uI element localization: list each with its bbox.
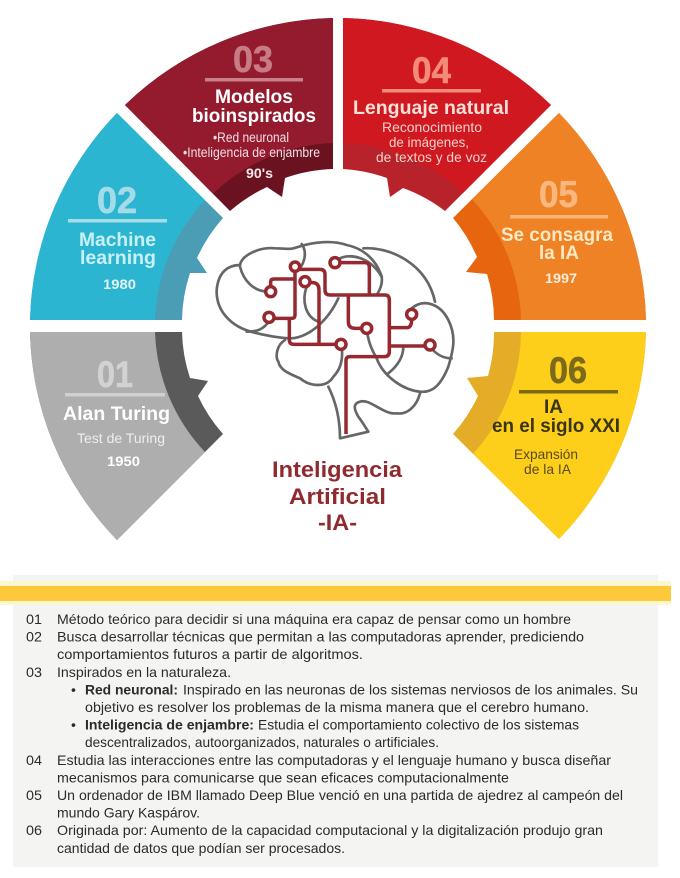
panel: 04 Lenguaje natural sector: 04 (412, 50, 451, 91)
text block: descriptions: 05 (26, 787, 42, 803)
panel: 02 Machine learning sector (30, 113, 223, 320)
text block: descriptions: Busca desarrollar técnicas que permitan a las computadoras aprender, prediciendo (57, 629, 584, 645)
text block: descriptions: Inteligencia de enjambre: (85, 717, 254, 733)
panel: 04 Lenguaje natural sector: de textos y de voz (376, 149, 487, 165)
text block: descriptions: • (71, 717, 76, 733)
panel: 04 Lenguaje natural sector: Reconocimiento (382, 119, 482, 135)
panel: 03 Modelos bioinspirados sector: Modelos (215, 87, 293, 108)
text block: descriptions: Estudia las interacciones entre las computadoras y el lenguaje humano y busca diseñar (57, 752, 611, 768)
panel: 01 Alan Turing sector: 01 (97, 354, 133, 395)
text block: descriptions: 02 (26, 629, 42, 645)
panel: 01 Alan Turing sector (30, 332, 223, 540)
text block: descriptions: 06 (26, 822, 42, 838)
text block: descriptions: Red neuronal: (85, 681, 178, 697)
panel: 05 Se consagra la IA sector: Se consagra (501, 224, 613, 246)
panel: 01 Alan Turing sector: 1950 (107, 453, 140, 469)
text block: descriptions: objetivo es resolver los problemas de la misma manera que el cerebro humano. (85, 699, 589, 715)
text block: descriptions: 01 (26, 611, 42, 627)
panel: 01 Alan Turing sector: Test de Turing (77, 430, 165, 446)
text block: descriptions: mecanismos para comunicarse que sean eficaces computacionalmente (57, 769, 509, 785)
text block: descriptions: comportamientos futuros a partir de algoritmos. (57, 646, 363, 662)
panel: 06 IA en el siglo XXI sector: Expansión (514, 446, 578, 462)
text block: descriptions: cantidad de datos que podían ser procesados. (57, 840, 345, 856)
panel: 04 Lenguaje natural sector (343, 18, 551, 211)
panel: 03 Modelos bioinspirados sector: •Inteligencia de enjambre (183, 145, 320, 160)
panel: 05 Se consagra la IA sector (453, 113, 646, 320)
text block: descriptions: Método teórico para decidir si una máquina era capaz de pensar como un hombre (57, 611, 571, 627)
panel: 06 IA en el siglo XXI sector: IA (544, 397, 563, 418)
panel: 06 IA en el siglo XXI sector: en el siglo XXI (492, 416, 620, 437)
panel: 01 Alan Turing sector: Alan Turing (63, 403, 170, 425)
panel: 04 Lenguaje natural sector: de imágenes, (389, 134, 469, 150)
text block: descriptions (26, 611, 638, 856)
panel: 05 Se consagra la IA sector: 05 (539, 174, 578, 215)
panel: 03 Modelos bioinspirados sector (125, 18, 333, 211)
panel: 06 IA en el siglo XXI sector: 06 (549, 350, 587, 391)
panel: 06 IA en el siglo XXI sector (453, 332, 646, 539)
text block: descriptions: descentralizados, autoorganizados, naturales o artificiales. (85, 734, 439, 750)
panel: 06 IA en el siglo XXI sector: de la IA (524, 461, 572, 477)
text block: descriptions: • (71, 681, 76, 697)
title: Inteligencia Artificial -IA- (272, 457, 403, 535)
panel: 02 Machine learning sector: 1980 (103, 276, 136, 292)
text block: descriptions: Inspirado en las neuronas de los sistemas nerviosos de los animales. Su (183, 681, 638, 697)
panel: 05 Se consagra la IA sector: la IA (539, 242, 579, 264)
panel: 02 Machine learning sector: 02 (97, 180, 137, 221)
text block: descriptions: 03 (26, 664, 42, 680)
text block: descriptions: Originada por: Aumento de la capacidad computacional y la digitalización produjo gran (57, 822, 603, 838)
text block: descriptions: Inspirados en la naturaleza. (57, 664, 231, 680)
panel: 03 Modelos bioinspirados sector: 03 (233, 39, 273, 80)
panel: description background (0, 575, 671, 867)
text block: descriptions: mundo Gary Kaspárov. (57, 805, 200, 821)
title: Inteligencia Artificial -IA-: -IA- (318, 510, 357, 535)
text block: descriptions: Estudia el comportamiento colectivo de los sistemas (258, 717, 579, 733)
text block: descriptions: 04 (26, 752, 42, 768)
panel: 03 Modelos bioinspirados sector: •Red neuronal (213, 130, 289, 145)
icon: circuit brain (217, 242, 453, 438)
panel: 04 Lenguaje natural sector: Lenguaje natural (353, 98, 509, 119)
text block: descriptions: Un ordenador de IBM llamado Deep Blue venció en una partida de ajedrez al campeón del (57, 787, 623, 803)
panel: 02 Machine learning sector: learning (80, 247, 156, 269)
title: Inteligencia Artificial -IA-: Inteligencia (272, 457, 403, 482)
title: Inteligencia Artificial -IA-: Artificial (289, 484, 386, 509)
panel: 05 Se consagra la IA sector: 1997 (545, 270, 577, 286)
panel: 03 Modelos bioinspirados sector: bioinspirados (192, 106, 316, 127)
panel: 02 Machine learning sector: Machine (79, 229, 156, 251)
panel: 03 Modelos bioinspirados sector: 90's (246, 165, 273, 181)
